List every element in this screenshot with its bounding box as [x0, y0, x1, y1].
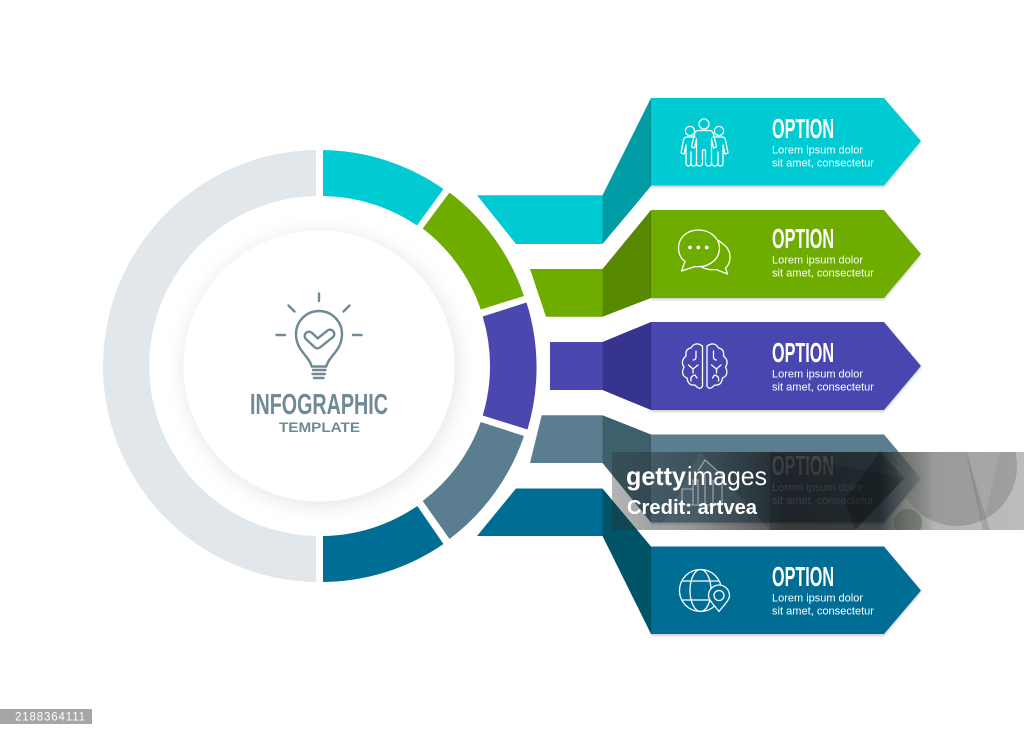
- body 1: sit amet, consectetur: [772, 158, 874, 170]
- body 2: sit amet, consectetur: [772, 268, 874, 280]
- heading 3: OPTION: [772, 337, 834, 368]
- arrow banner 1: [651, 98, 921, 186]
- ring segment 2: [423, 192, 524, 310]
- ring segment 5: [323, 506, 444, 582]
- body 4: [772, 482, 874, 507]
- connector 1: [477, 195, 602, 244]
- option 2: [530, 210, 921, 317]
- option 3: [550, 322, 921, 410]
- center subtitle: TEMPLATE: [279, 420, 360, 435]
- arrow banner 2: [651, 210, 921, 298]
- heading 4: OPTION: [772, 450, 834, 481]
- icon: globe with pin: [680, 570, 730, 612]
- body 5: sit amet, consectetur: [772, 606, 874, 618]
- getty images logo: images: [687, 461, 767, 491]
- body 3: [772, 368, 874, 394]
- ring segment 3: [483, 302, 537, 430]
- faint city icon: [682, 460, 722, 505]
- heading 2: OPTION: [772, 223, 834, 254]
- body 2: Lorem ipsum dolor: [772, 254, 863, 266]
- body 2: [772, 254, 874, 280]
- ring chart: [103, 150, 537, 582]
- connector 5: [477, 488, 602, 536]
- connector 3: [550, 342, 602, 390]
- icon: lightbulb with check: [276, 294, 362, 378]
- ring segment: grey half: [103, 150, 316, 582]
- center title: INFOGRAPHIC: [250, 389, 388, 421]
- icon: speech bubbles: [678, 230, 730, 274]
- icon: brain: [682, 344, 727, 388]
- credit line: Credit: artvea: [627, 497, 758, 519]
- body 3: Lorem ipsum dolor: [772, 368, 863, 380]
- body 1: [772, 144, 874, 170]
- option 1: [477, 98, 921, 244]
- ring segment 4: [423, 422, 524, 539]
- heading 5: OPTION: [772, 561, 834, 592]
- body 5: Lorem ipsum dolor: [772, 592, 863, 604]
- option 4: [530, 415, 921, 522]
- image id label: [0, 709, 92, 724]
- getty images logo: [626, 461, 767, 519]
- icon: people: [681, 119, 728, 166]
- option 5: [477, 488, 921, 634]
- fold 4: [602, 415, 651, 522]
- body 4: Lorem ipsum dolor: [772, 482, 863, 494]
- ring segment 1: [323, 150, 444, 226]
- fold 3: [602, 322, 651, 410]
- fold 5: [602, 488, 651, 634]
- image id label: 2188364111: [15, 712, 85, 724]
- body 3: sit amet, consectetur: [772, 382, 874, 394]
- body 5: [772, 592, 874, 618]
- arrow banner 5: [651, 546, 921, 634]
- center circle: [184, 230, 454, 502]
- connector 4: [530, 415, 602, 463]
- fold 2: [602, 210, 651, 317]
- body 4: sit amet, consectetur: [772, 495, 874, 507]
- arrow banner 4: [651, 434, 921, 522]
- heading 1: OPTION: [772, 113, 834, 144]
- connector 2: [530, 269, 602, 317]
- watermark band: [612, 452, 1024, 530]
- getty images logo: getty: [626, 461, 687, 491]
- arrow banner 3: [651, 322, 921, 410]
- body 1: Lorem ipsum dolor: [772, 144, 863, 156]
- fold 1: [602, 98, 651, 244]
